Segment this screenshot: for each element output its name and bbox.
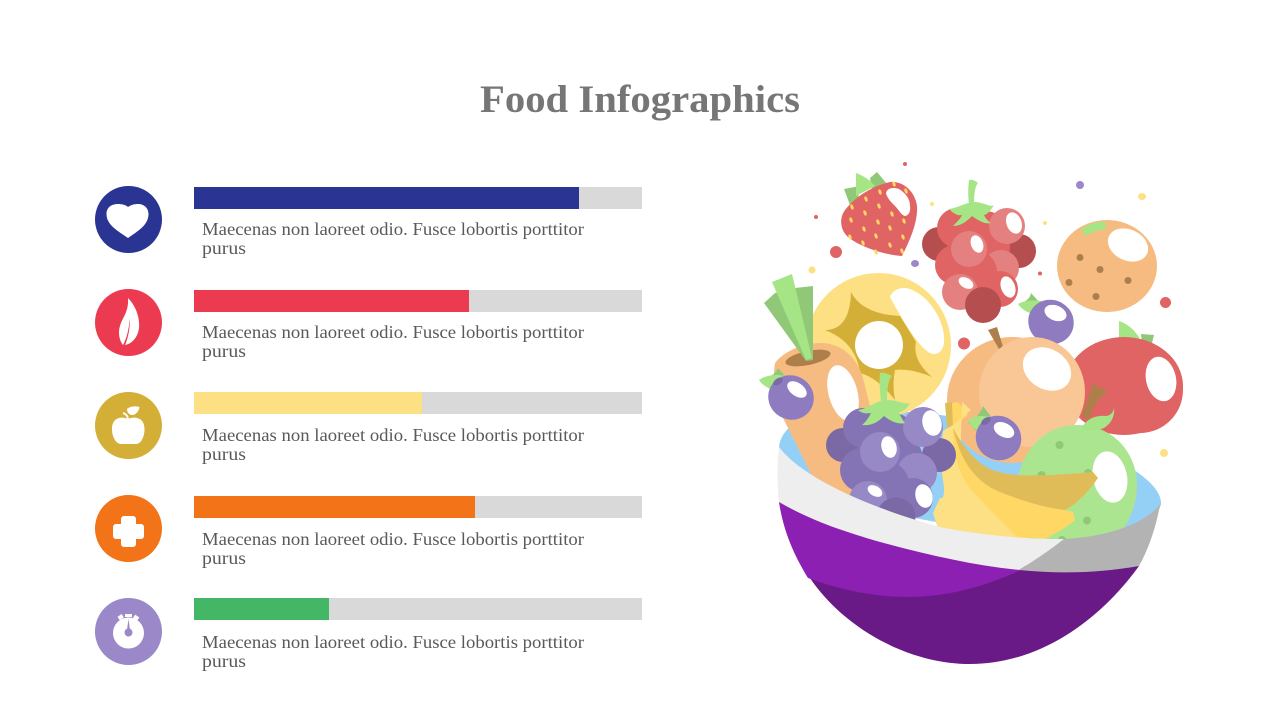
progress bar xyxy=(194,598,642,620)
row 4: cross xyxy=(95,495,642,568)
description: purus xyxy=(202,548,246,568)
bowl: purple band xyxy=(779,502,1025,597)
blueberry: on banana xyxy=(968,406,1029,469)
strawberry xyxy=(841,172,917,256)
icon: heart xyxy=(95,186,162,253)
banana xyxy=(933,402,1098,540)
icon: leaf xyxy=(95,289,162,356)
progress bar xyxy=(194,496,642,518)
bowl: white rim xyxy=(778,447,1064,570)
description: purus xyxy=(202,341,246,361)
stem: apple xyxy=(1082,384,1108,420)
pineapple slice xyxy=(806,273,951,418)
icon: stopwatch xyxy=(95,598,162,665)
bowl: dark base xyxy=(808,566,1139,664)
orange xyxy=(1057,220,1157,312)
green pear xyxy=(1018,408,1137,545)
description: Maecenas non laoreet odio. Fusce lobortis porttitor xyxy=(202,322,584,342)
icon: apple xyxy=(95,392,162,459)
bowl: grey rim xyxy=(1019,503,1161,572)
title: Food Infographics xyxy=(480,78,800,121)
carrot xyxy=(764,274,880,510)
apple xyxy=(1065,321,1183,435)
peach xyxy=(947,327,1085,463)
description: purus xyxy=(202,651,246,671)
row 1: heart xyxy=(95,186,642,258)
progress bar xyxy=(194,290,642,312)
progress bar xyxy=(194,187,642,209)
bowl xyxy=(778,447,1161,664)
illustration: fruit bowl xyxy=(759,162,1183,664)
description: Maecenas non laoreet odio. Fusce lobortis porttitor xyxy=(202,425,584,445)
row 5: stopwatch xyxy=(95,598,642,671)
bowl interior xyxy=(779,410,1161,545)
blueberry: upper right xyxy=(1018,291,1082,353)
description: Maecenas non laoreet odio. Fusce lobortis porttitor xyxy=(202,632,584,652)
description: purus xyxy=(202,444,246,464)
description: Maecenas non laoreet odio. Fusce lobortis porttitor xyxy=(202,219,584,239)
row 3: apple xyxy=(95,392,642,464)
description: purus xyxy=(202,238,246,258)
grapes xyxy=(826,373,956,536)
icon: medical cross xyxy=(95,495,162,562)
description: Maecenas non laoreet odio. Fusce lobortis porttitor xyxy=(202,529,584,549)
raspberry xyxy=(922,180,1036,323)
progress bar xyxy=(194,392,642,414)
floating dots xyxy=(808,162,1171,457)
blueberry: left xyxy=(759,367,822,428)
row 2: leaf xyxy=(95,289,642,361)
